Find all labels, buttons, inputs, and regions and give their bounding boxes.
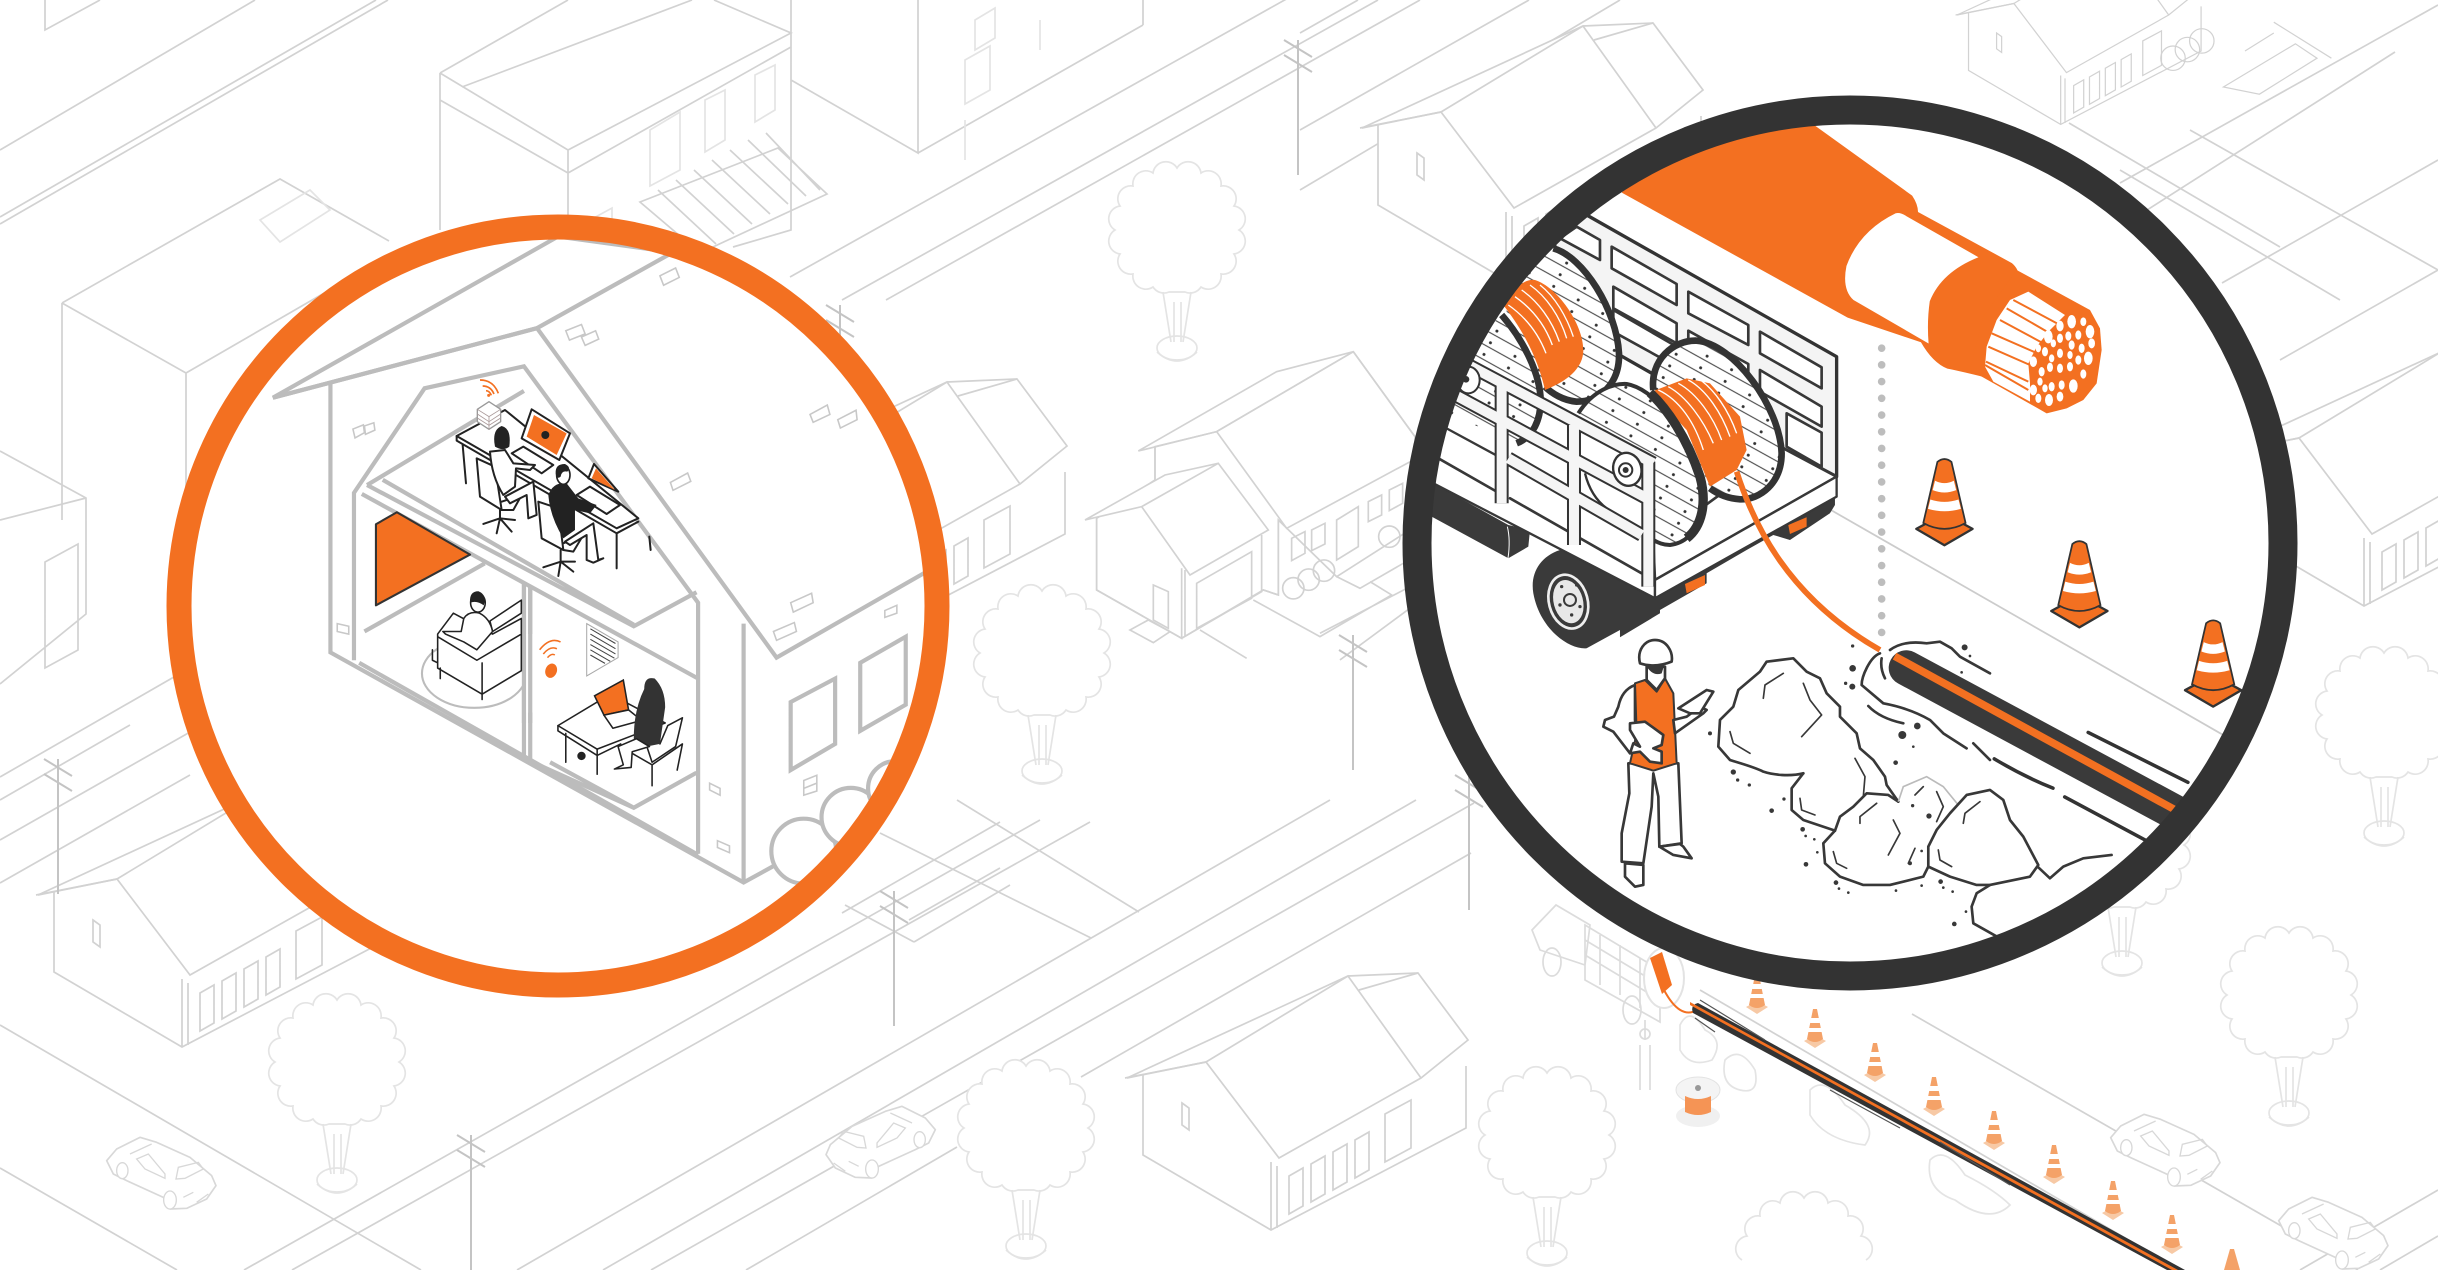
back-left spool — [1440, 248, 1619, 443]
upper desk — [457, 410, 651, 568]
small fibre trench — [1690, 1000, 2185, 1270]
utility poles — [44, 40, 1483, 1270]
shrubs — [769, 760, 891, 885]
panel: orange circle, home interior — [179, 227, 937, 985]
trench edges — [1862, 642, 1990, 760]
laptop desk — [558, 680, 665, 774]
fibre bundle end — [1970, 270, 2102, 413]
house: top right — [1956, 0, 2331, 124]
soil specks — [1708, 644, 1971, 926]
house: top centre — [1360, 23, 1703, 280]
trees — [269, 162, 2438, 1266]
wall vents — [337, 268, 897, 853]
orange ring — [179, 227, 937, 985]
small dirt piles — [1680, 1016, 2010, 1214]
building: shop with awning — [440, 0, 1143, 253]
person at laptop — [614, 678, 682, 786]
worker with tablet — [1603, 640, 1713, 887]
road edge, dotted guide and cable jacket — [1622, 90, 2229, 738]
truck near rail bars — [1456, 360, 1656, 587]
wifi router — [477, 380, 501, 429]
house shell — [273, 237, 934, 883]
person on sofa — [422, 582, 533, 723]
pulleys — [1457, 367, 1645, 489]
small cable reel — [1644, 948, 1697, 1012]
monitor 2 — [588, 464, 618, 492]
truck bed floor — [1653, 448, 1837, 580]
back-right spool — [1653, 341, 1782, 499]
house: bottom centre — [1125, 973, 1468, 1230]
pile creases — [1730, 673, 1980, 868]
house: bottom left — [36, 790, 379, 1047]
chassis — [1432, 483, 1835, 610]
small truck with spool — [1532, 905, 1660, 1090]
house: centre with garage — [1085, 352, 1417, 660]
document on wall — [587, 624, 618, 676]
person: man at desk — [538, 464, 603, 576]
traffic cones and trench — [1895, 459, 2241, 841]
front spool and coil — [1578, 378, 1747, 545]
flatbed truck — [1432, 215, 1880, 650]
cut-away house — [273, 237, 934, 884]
shop windows — [260, 8, 1040, 272]
keyboards — [512, 447, 620, 514]
house: right edge — [2218, 349, 2438, 606]
small traffic cones — [1746, 975, 2240, 1270]
cars — [107, 1106, 2388, 1269]
dirt piles — [1718, 658, 2112, 938]
truck side board — [1433, 427, 1837, 598]
upper office — [457, 380, 651, 576]
monitor 1 — [522, 409, 570, 460]
panel: dark circle, fibre installation — [1417, 90, 2283, 976]
traffic cones — [1916, 459, 2241, 707]
truck wheel — [1533, 550, 1660, 648]
cable from spool to trench — [1737, 472, 1880, 650]
house: behind orange circle — [724, 379, 1067, 636]
TV on wall — [376, 512, 470, 605]
truck back rail — [1553, 215, 1837, 477]
building: left corner — [0, 0, 100, 684]
small spool on ground — [1676, 1077, 1720, 1127]
wifi and smart speaker — [540, 640, 561, 680]
dark ring — [1417, 110, 2283, 976]
worker and dirt piles — [1603, 640, 2112, 938]
trench with conduit — [1895, 656, 2188, 841]
building: left block — [62, 179, 390, 560]
person: woman at desk — [477, 426, 537, 533]
